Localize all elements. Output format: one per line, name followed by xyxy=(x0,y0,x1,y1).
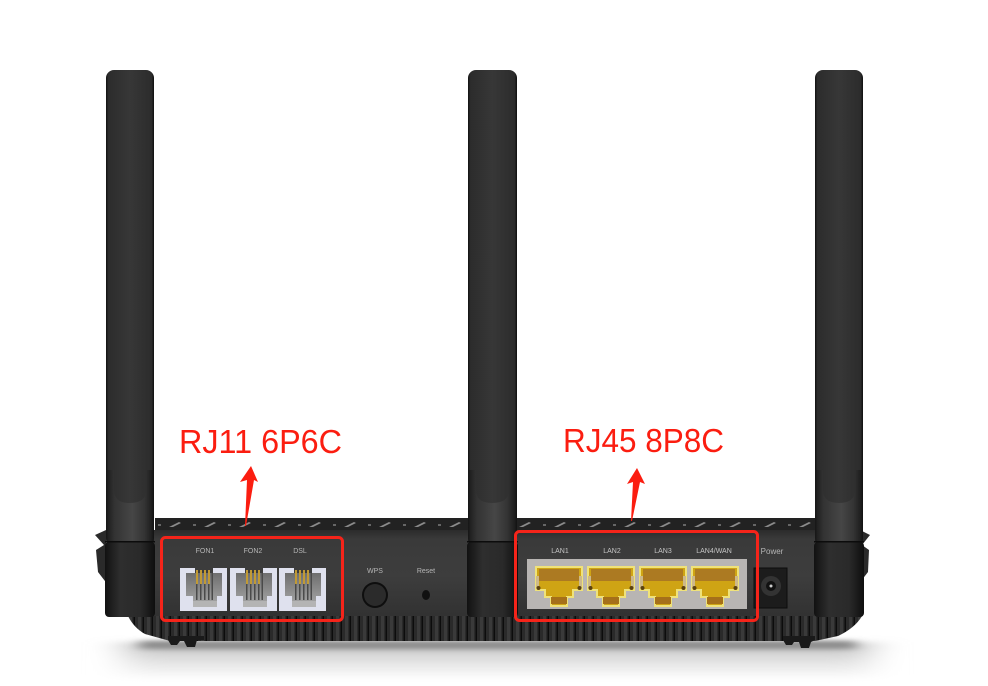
port labels: phone xyxy=(196,548,307,555)
RJ45 ports xyxy=(527,559,747,609)
highlight box: RJ45 ports xyxy=(516,532,758,620)
port labels: LAN: LAN3 xyxy=(654,548,672,555)
arrow: to RJ45 xyxy=(627,468,645,521)
port labels: phone: FON2 xyxy=(244,548,262,555)
arrow: to RJ11 xyxy=(240,466,258,526)
rear panel xyxy=(150,530,820,622)
feet xyxy=(168,636,815,648)
highlight box: RJ11 ports xyxy=(162,538,342,620)
ground shadow xyxy=(125,641,870,680)
WPS button xyxy=(362,568,388,608)
ribbed underside xyxy=(128,616,862,641)
label: RJ11 6P6C: RJ11 6P6C xyxy=(179,423,342,460)
port labels: phone: FON1 xyxy=(196,548,214,555)
port labels: LAN: LAN2 xyxy=(603,548,621,555)
Reset button xyxy=(417,568,435,600)
port labels: LAN xyxy=(551,548,732,555)
antenna: middle xyxy=(467,70,518,617)
RJ11 ports xyxy=(180,568,326,611)
WPS button: WPS xyxy=(367,568,383,575)
power socket xyxy=(754,547,787,608)
power socket: Power xyxy=(761,547,784,556)
label: RJ45 8P8C: RJ45 8P8C xyxy=(563,422,724,459)
antenna: left xyxy=(105,70,155,617)
antenna: right xyxy=(814,70,864,617)
port labels: phone: DSL xyxy=(293,548,307,555)
port labels: LAN: LAN4/WAN xyxy=(696,548,732,555)
vent strip xyxy=(155,518,815,531)
Reset button: Reset xyxy=(417,568,435,575)
side clips xyxy=(95,530,870,585)
router body xyxy=(95,518,870,648)
port labels: LAN: LAN1 xyxy=(551,548,569,555)
